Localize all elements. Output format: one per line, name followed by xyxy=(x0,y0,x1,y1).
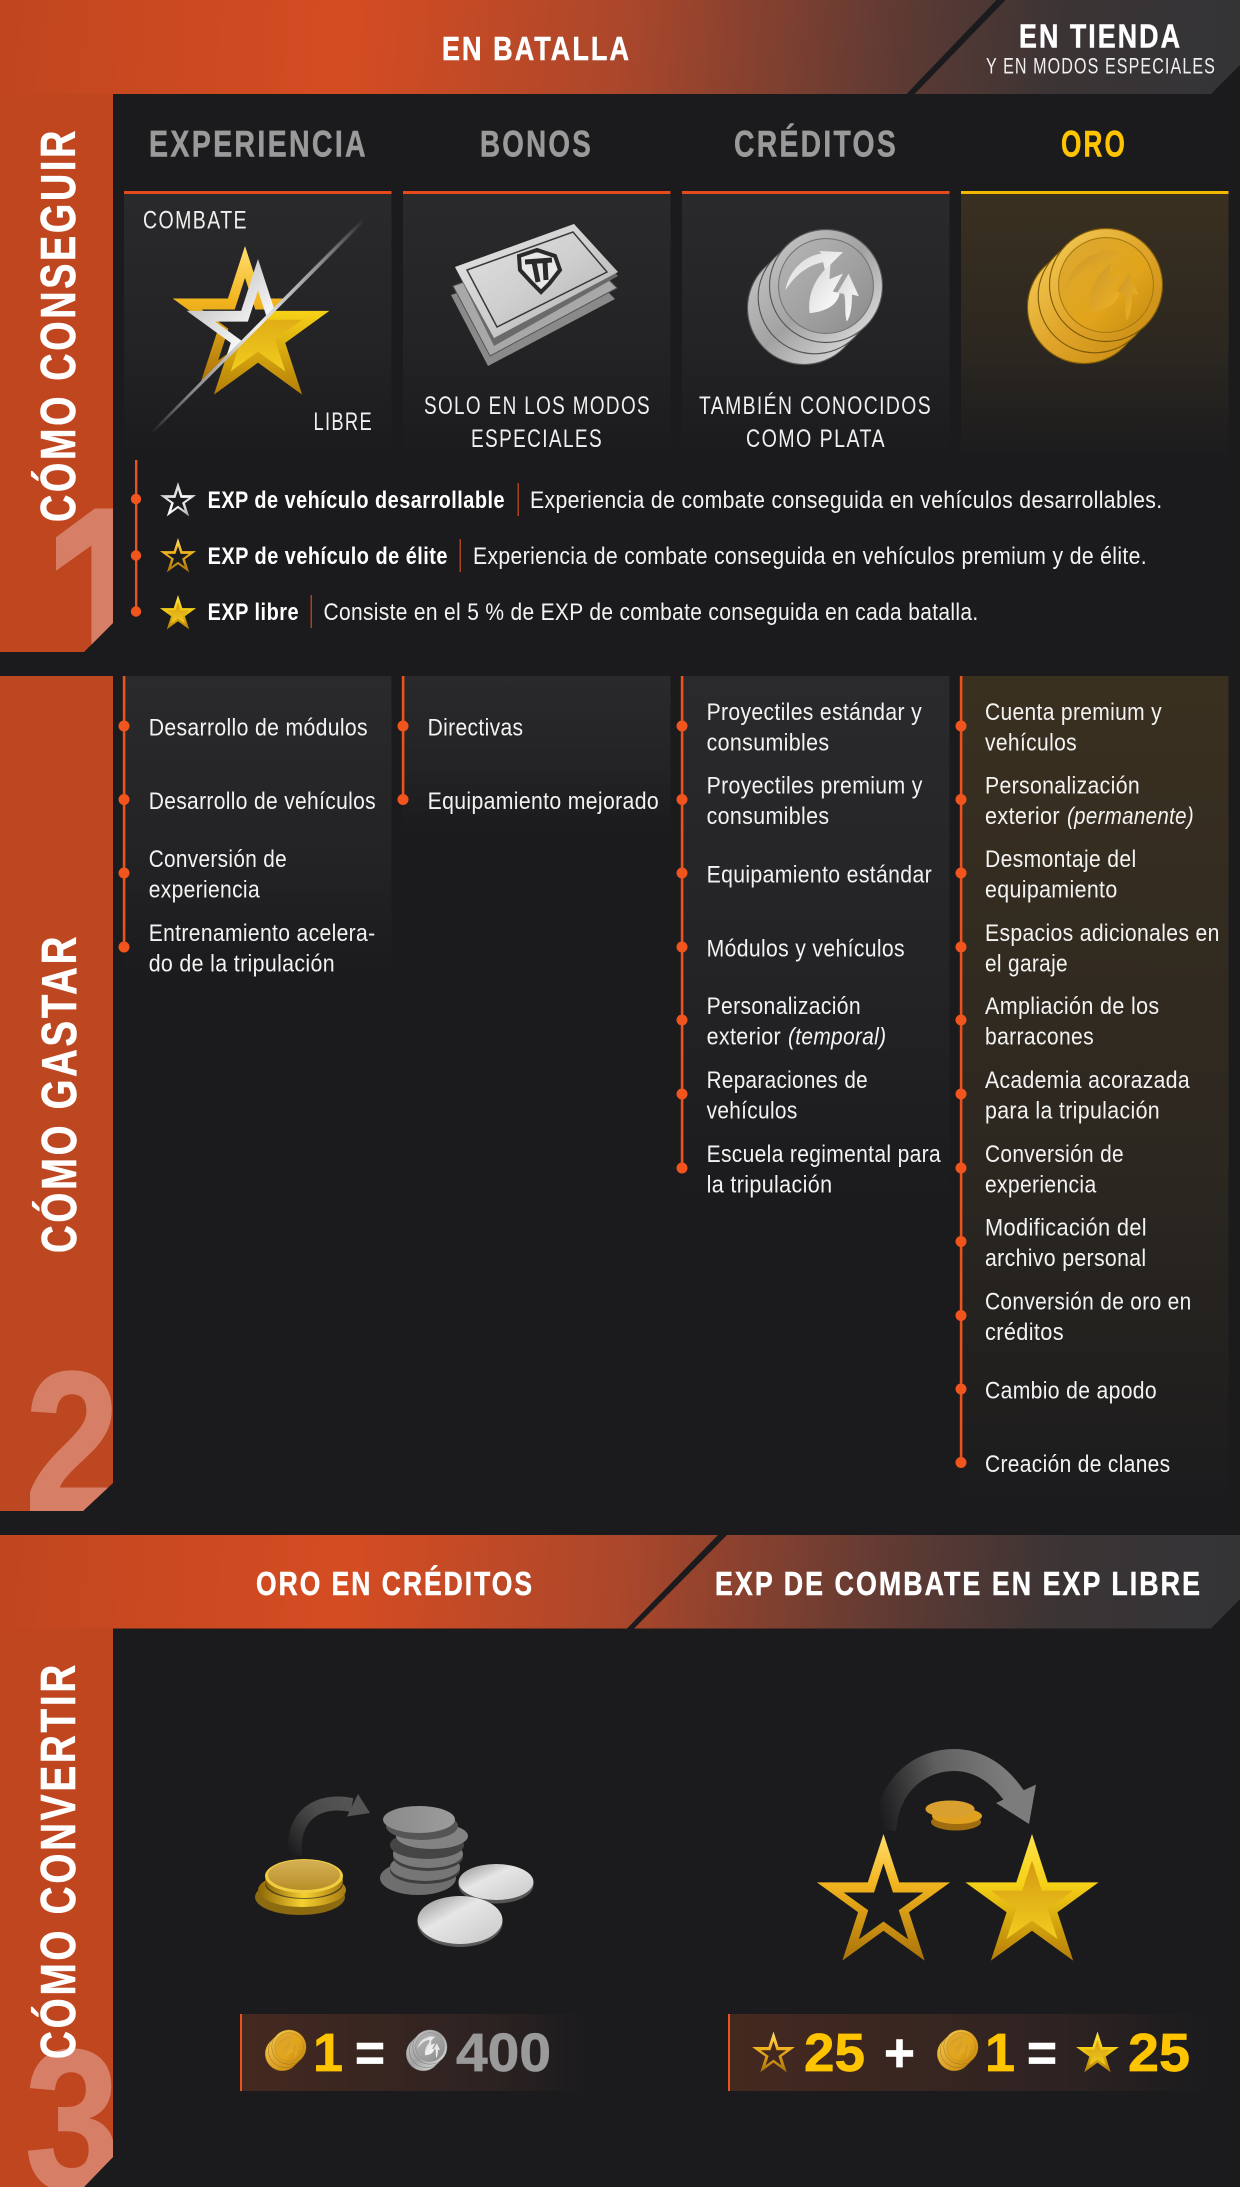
equation: exp conversion: + xyxy=(884,2023,915,2083)
list: bonos xyxy=(398,676,670,831)
card: oro xyxy=(961,191,1228,454)
list: oro: equipamiento xyxy=(985,876,1118,904)
label: tambien conocidos como plata: COMO PLATA xyxy=(746,425,886,453)
row: exp de vehiculo desarrollable: Experiencia de combate conseguida en vehículos desarrollables. xyxy=(530,487,1162,514)
vertical section title: CÓMO CONVERTIR xyxy=(31,1662,86,2059)
list: oro: el garaje xyxy=(985,950,1068,978)
heading: en tienda: EN TIENDA xyxy=(1019,18,1182,54)
list: creditos xyxy=(676,676,950,1201)
list: oro: Cambio de apodo xyxy=(985,1378,1157,1404)
label: tambien conocidos como plata: TAMBIÉN CONOCIDOS xyxy=(699,391,932,420)
label: solo en los modos especiales: SOLO EN LOS MODOS xyxy=(424,392,651,420)
vertical section title: CÓMO GASTAR xyxy=(32,934,87,1253)
header band: en batalla and en tienda xyxy=(0,0,1240,94)
list: oro: Creación de clanes xyxy=(985,1451,1170,1478)
list: experiencia: Conversión de xyxy=(149,846,287,873)
list: creditos: la tripulación xyxy=(707,1172,832,1198)
list: creditos: Módulos y vehículos xyxy=(707,936,905,962)
heading: oro en creditos: ORO EN CRÉDITOS xyxy=(256,1565,534,1602)
star: free exp filled xyxy=(965,1834,1099,1961)
equation: gold to credits: = xyxy=(355,2023,385,2083)
list: oro: Academia acorazada xyxy=(985,1067,1190,1094)
row: exp libre: EXP libre xyxy=(208,599,299,626)
loose silver coins xyxy=(418,1864,534,1947)
card: creditos xyxy=(682,191,950,454)
icon: outline star xyxy=(752,2032,795,2072)
list: creditos: (temporal) xyxy=(788,1024,886,1050)
equation: exp conversion: 1 xyxy=(985,2023,1015,2083)
row: exp de vehiculo desarrollable xyxy=(160,482,1162,516)
list: creditos: exterior xyxy=(707,1024,781,1050)
heading: en batalla: EN BATALLA xyxy=(442,30,631,67)
column title: creditos: CRÉDITOS xyxy=(734,124,898,164)
list: oro: barracones xyxy=(985,1024,1094,1050)
column title: bonos: BONOS xyxy=(480,124,593,164)
list: oro: exterior xyxy=(985,803,1060,830)
section 1: how to earn xyxy=(0,0,1240,652)
list: creditos: vehículos xyxy=(707,1098,798,1124)
icon: gold coins xyxy=(265,2030,306,2071)
list: experiencia: Entrenamiento acelera- xyxy=(149,920,376,947)
numeral 1: 1 xyxy=(44,459,163,732)
equation: gold to credits: 400 xyxy=(456,2023,551,2083)
section 2: how to spend xyxy=(0,676,1228,1554)
list: oro: Modificación del xyxy=(985,1214,1147,1242)
row: exp libre xyxy=(160,595,978,629)
icon: filled star xyxy=(1076,2032,1119,2072)
equation: exp conversion: 25 xyxy=(1128,2023,1190,2083)
silver coin pile xyxy=(380,1806,468,1895)
list: oro: Cuenta premium y xyxy=(985,699,1162,726)
card: experiencia xyxy=(124,191,392,454)
list: experiencia: experiencia xyxy=(149,876,260,904)
arrow xyxy=(885,1760,1036,1830)
row: exp de vehiculo de elite: EXP de vehículo de élite xyxy=(208,543,448,570)
list: oro: Conversión de xyxy=(985,1141,1124,1168)
illustration: combat exp to free exp xyxy=(817,1760,1099,1961)
list: creditos: Equipamiento estándar xyxy=(707,862,932,888)
list: oro: Conversión de oro en xyxy=(985,1288,1192,1316)
list: creditos: Proyectiles estándar y xyxy=(707,699,922,726)
equation: exp conversion xyxy=(728,2014,1205,2091)
gold coin stack xyxy=(255,1859,346,1915)
side band xyxy=(0,94,113,652)
row: exp de vehiculo de elite xyxy=(160,538,1147,572)
icon: gold coins xyxy=(1027,228,1162,364)
list: oro: para la tripulación xyxy=(985,1098,1160,1124)
row: exp libre: Consiste en el 5 % de EXP de combate conseguida en cada batalla. xyxy=(324,599,978,626)
list: creditos: Personalización xyxy=(707,993,861,1020)
list: creditos: consumibles xyxy=(707,730,829,756)
equation: gold to credits xyxy=(240,2014,585,2091)
row: exp de vehiculo desarrollable: EXP de vehículo desarrollable xyxy=(208,487,505,514)
list: oro: Desmontaje del xyxy=(985,846,1136,873)
card: bonos xyxy=(403,191,670,454)
equation: gold to credits: 1 xyxy=(313,2023,343,2083)
list: oro: experiencia xyxy=(985,1172,1096,1198)
list: experiencia: Desarrollo de módulos xyxy=(149,714,368,742)
list: experiencia: Desarrollo de vehículos xyxy=(149,788,376,815)
vertical section title: CÓMO CONSEGUIR xyxy=(31,128,86,522)
list: oro: Ampliación de los xyxy=(985,993,1160,1020)
list: bonos: Directivas xyxy=(428,714,523,742)
label: tambien conocidos como plata xyxy=(699,391,932,453)
label: solo en los modos especiales xyxy=(424,392,651,453)
row: exp de vehiculo de elite: Experiencia de combate conseguida en vehículos premium y de élite. xyxy=(473,543,1147,570)
legend: experience types xyxy=(131,460,1162,629)
icon: bond notes xyxy=(451,224,618,366)
small gold coins xyxy=(926,1800,982,1830)
list: experiencia: do de la tripulación xyxy=(149,950,335,978)
section 3: how to convert xyxy=(0,1535,1240,2187)
list: creditos: Escuela regimental para xyxy=(707,1141,941,1168)
icon: split star xyxy=(150,218,365,434)
numeral 2: 2 xyxy=(25,1331,120,1554)
list: creditos: consumibles xyxy=(707,803,829,830)
illustration: gold to credits xyxy=(255,1794,534,1947)
equation: exp conversion: 25 xyxy=(804,2023,865,2083)
list: oro: créditos xyxy=(985,1319,1064,1346)
column title: experiencia: EXPERIENCIA xyxy=(149,124,368,164)
list: oro: (permanente) xyxy=(1067,803,1194,830)
icon: silver coins xyxy=(406,2030,447,2071)
side band xyxy=(0,676,113,1511)
list: creditos: Reparaciones de xyxy=(707,1067,868,1094)
header band: conversions xyxy=(0,1535,1240,1628)
side band xyxy=(0,1628,113,2187)
label: combate: COMBATE xyxy=(143,206,248,234)
arrow xyxy=(295,1794,370,1856)
list: bonos: Equipamiento mejorado xyxy=(428,788,659,815)
icon: gold coins xyxy=(937,2030,978,2071)
icon: silver coins xyxy=(747,230,882,365)
label: solo en los modos especiales: ESPECIALES xyxy=(471,425,603,453)
list: experiencia xyxy=(118,676,392,978)
list: oro: archivo personal xyxy=(985,1245,1146,1272)
list: oro: Personalización xyxy=(985,772,1140,800)
list: oro: vehículos xyxy=(985,730,1077,756)
star: combat exp outline xyxy=(817,1834,950,1961)
equation: exp conversion: = xyxy=(1027,2023,1057,2083)
column title: oro: ORO xyxy=(1061,124,1127,164)
list: creditos: Proyectiles premium y xyxy=(707,772,923,800)
label: libre: LIBRE xyxy=(314,408,373,436)
list: oro xyxy=(956,676,1228,1491)
